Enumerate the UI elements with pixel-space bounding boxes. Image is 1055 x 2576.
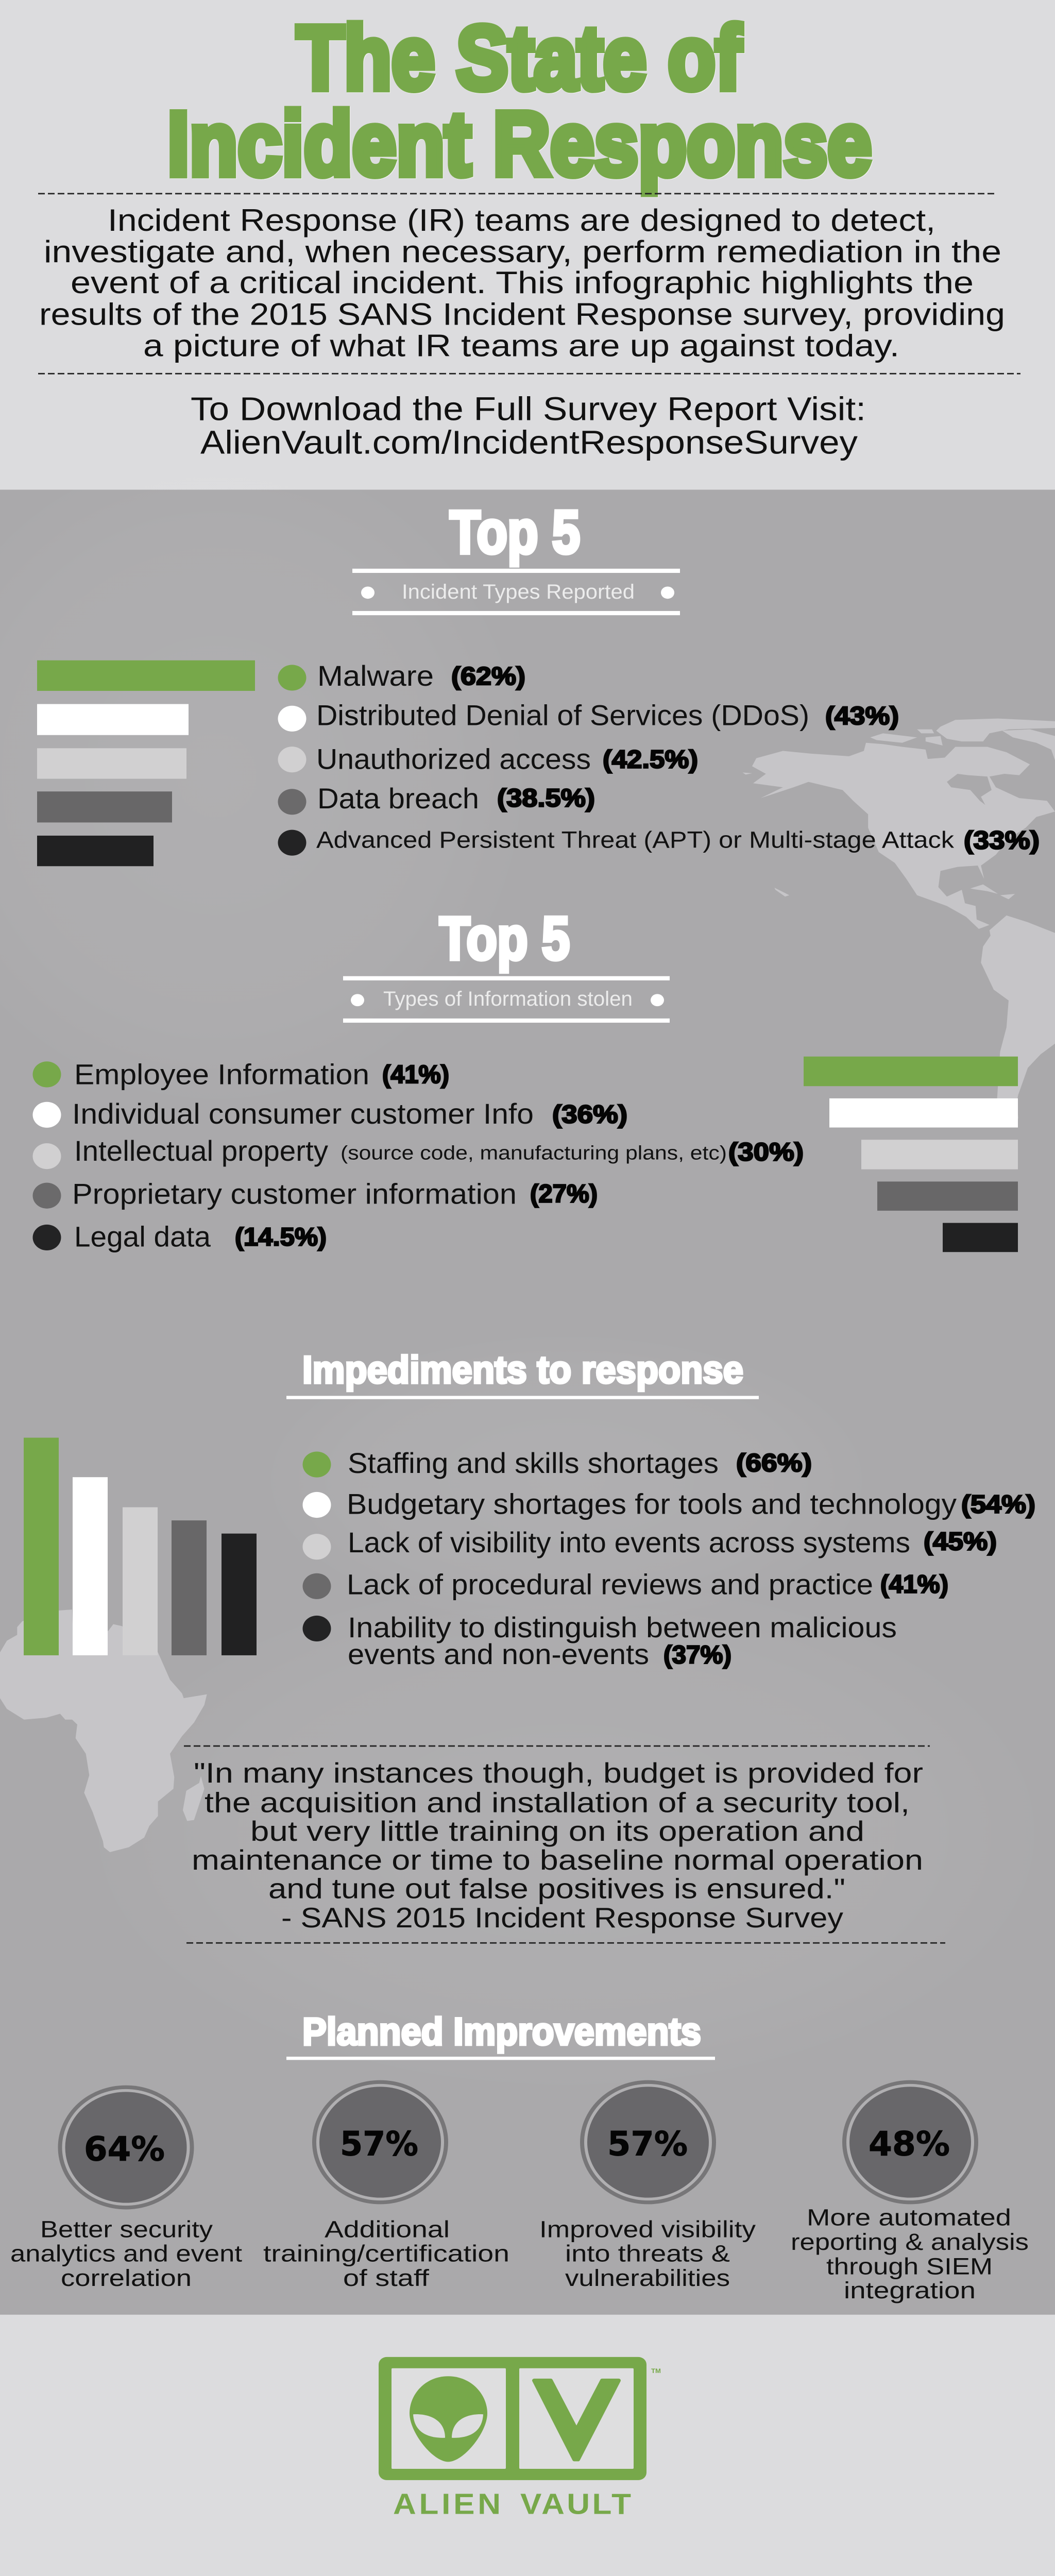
stat: 64 percent: Better security bbox=[40, 2216, 213, 2243]
legend: information stolen bbox=[33, 1059, 804, 1253]
legend: impediments: Staffing and skills shortages bbox=[348, 1447, 719, 1479]
legend: incident types bbox=[278, 660, 1040, 856]
stat: 57 percent training: 57% bbox=[340, 2125, 418, 2164]
legend: information stolen: (27%) bbox=[530, 1179, 598, 1208]
header section bbox=[38, 7, 1020, 461]
legend: information stolen: (source code, manufacturing plans, etc) bbox=[341, 1142, 727, 1164]
title: The State of bbox=[297, 7, 742, 108]
stat: 57 percent visibility: into threats & bbox=[565, 2241, 730, 2267]
subheading: types of information stolen bbox=[343, 976, 670, 1023]
intro paragraph: Incident Response (IR) teams are designed to detect, bbox=[108, 204, 935, 238]
heading: top 5: Top 5 bbox=[439, 905, 570, 973]
panel: planned improvements bbox=[10, 2010, 1029, 2303]
callout: sans quote: maintenance or time to baseline normal operation bbox=[192, 1844, 923, 1876]
legend: incident types: Advanced Persistent Threat (APT) or Multi-stage Attack bbox=[316, 827, 954, 853]
legend: information stolen: Legal data bbox=[74, 1221, 211, 1253]
legend: impediments: Lack of visibility into events across systems bbox=[348, 1527, 910, 1559]
stat: 57 percent training: of staff bbox=[343, 2265, 430, 2292]
intro paragraph bbox=[39, 204, 1005, 363]
legend: impediments: Budgetary shortages for tools and technology bbox=[347, 1488, 957, 1520]
legend: impediments: (37%) bbox=[663, 1640, 731, 1669]
legend: impediments: (41%) bbox=[880, 1570, 948, 1598]
wordmark: ALIEN bbox=[393, 2487, 501, 2520]
stat: 48 percent: reporting & analysis bbox=[791, 2229, 1029, 2255]
callout: sans quote: the acquisition and installation of a security tool, bbox=[205, 1787, 910, 1819]
logo: alien vault bbox=[379, 2357, 661, 2520]
legend: incident types: (33%) bbox=[964, 826, 1040, 854]
legend: impediments: (45%) bbox=[924, 1527, 997, 1555]
stat: 64 percent: 64% bbox=[84, 2130, 165, 2169]
download call to action bbox=[191, 391, 866, 461]
download call to action: To Download the Full Survey Report Visit: bbox=[191, 391, 866, 428]
intro paragraph: results of the 2015 SANS Incident Response survey, providing bbox=[39, 297, 1005, 332]
title: Incident Response bbox=[167, 93, 872, 194]
stat: 57 percent visibility bbox=[539, 2080, 756, 2292]
callout: sans quote: "In many instances though, budget is provided for bbox=[194, 1758, 923, 1789]
legend: information stolen: Employee Information bbox=[74, 1059, 369, 1091]
stat: 57 percent training: training/certification bbox=[263, 2241, 509, 2267]
subheading: types of information stolen: Types of Information stolen bbox=[383, 987, 633, 1010]
legend: incident types: Malware bbox=[317, 660, 434, 692]
callout: sans quote bbox=[184, 1746, 945, 1943]
legend: incident types: (62%) bbox=[451, 662, 525, 690]
title bbox=[167, 7, 872, 194]
panel: impediments to response bbox=[24, 1348, 1035, 1671]
heading: impediments: Impediments to response bbox=[302, 1348, 743, 1392]
legend: impediments: events and non-events bbox=[348, 1639, 649, 1671]
stat: 57 percent visibility: vulnerabilities bbox=[565, 2265, 730, 2292]
heading: planned improvements: Planned Improvements bbox=[302, 2010, 701, 2053]
legend: incident types: Unauthorized access bbox=[316, 743, 591, 775]
wordmark bbox=[393, 2487, 631, 2520]
icon: letter v bbox=[534, 2381, 619, 2460]
legend: incident types: Data breach bbox=[317, 783, 479, 815]
legend: information stolen: (41%) bbox=[382, 1060, 449, 1088]
world map: north and south america bbox=[742, 719, 1055, 1118]
stat: 57 percent training: Additional bbox=[325, 2216, 450, 2243]
stat: 48 percent: 48% bbox=[869, 2125, 950, 2164]
legend: incident types: (38.5%) bbox=[497, 784, 595, 812]
legend: impediments: Inability to distinguish between malicious bbox=[348, 1612, 897, 1644]
bar chart: impediments bbox=[24, 1438, 257, 1655]
panel: top 5 incident types bbox=[37, 499, 1040, 866]
stat: 48 percent: integration bbox=[844, 2278, 976, 2303]
panel: survey data background bbox=[0, 490, 1055, 2315]
heading: top 5: Top 5 bbox=[450, 499, 580, 566]
stat: 57 percent training bbox=[263, 2080, 509, 2292]
subheading: incident types reported bbox=[352, 569, 680, 615]
stat: 48 percent: More automated bbox=[807, 2205, 1011, 2231]
stat: 48 percent: through SIEM bbox=[826, 2253, 993, 2280]
callout: sans quote: and tune out false positives is ensured." bbox=[268, 1873, 845, 1905]
callout: sans quote: but very little training on its operation and bbox=[250, 1816, 864, 1848]
wordmark: VAULT bbox=[520, 2487, 631, 2520]
stat: 64 percent: correlation bbox=[61, 2265, 192, 2292]
legend: incident types: (43%) bbox=[825, 701, 899, 730]
legend: impediments: (54%) bbox=[961, 1490, 1035, 1518]
stat: 64 percent bbox=[10, 2086, 242, 2292]
legend: information stolen: Proprietary customer information bbox=[72, 1178, 517, 1210]
legend: information stolen: Individual consumer customer Info bbox=[72, 1098, 534, 1130]
legend: information stolen: (30%) bbox=[728, 1138, 804, 1166]
stat: 48 percent bbox=[791, 2080, 1029, 2303]
legend: information stolen: (36%) bbox=[552, 1100, 627, 1128]
legend: incident types: Distributed Denial of Services (DDoS) bbox=[316, 700, 809, 732]
legend: impediments: Lack of procedural reviews and practice bbox=[347, 1569, 873, 1601]
panel: footer background bbox=[0, 2315, 1055, 2576]
intro paragraph: a picture of what IR teams are up against today. bbox=[143, 329, 899, 363]
stat: 64 percent: analytics and event bbox=[10, 2241, 242, 2267]
legend: information stolen: (14.5%) bbox=[235, 1223, 327, 1251]
legend: impediments: (66%) bbox=[736, 1448, 812, 1477]
callout: sans quote: - SANS 2015 Incident Response Survey bbox=[281, 1902, 843, 1934]
intro paragraph: event of a critical incident. This infographic highlights the bbox=[71, 266, 974, 300]
subheading: incident types reported: Incident Types Reported bbox=[402, 580, 635, 603]
panel: top 5 information stolen bbox=[33, 905, 1018, 1253]
stat: 57 percent visibility: Improved visibility bbox=[539, 2216, 756, 2243]
legend: impediments bbox=[303, 1447, 1035, 1671]
download call to action: AlienVault.com/IncidentResponseSurvey bbox=[200, 424, 858, 461]
bar chart: information stolen bbox=[804, 1057, 1018, 1252]
world map: africa and madagascar bbox=[0, 1609, 207, 1852]
legend: incident types: (42.5%) bbox=[603, 745, 698, 773]
trademark: TM bbox=[651, 2367, 661, 2375]
legend: information stolen: Intellectual property bbox=[74, 1136, 329, 1167]
stat: 57 percent visibility: 57% bbox=[607, 2125, 688, 2164]
bar chart: incident types bbox=[37, 660, 255, 866]
panel: header background bbox=[0, 0, 1055, 490]
icon: alien head bbox=[410, 2376, 487, 2462]
intro paragraph: investigate and, when necessary, perform remediation in the bbox=[44, 235, 1001, 269]
